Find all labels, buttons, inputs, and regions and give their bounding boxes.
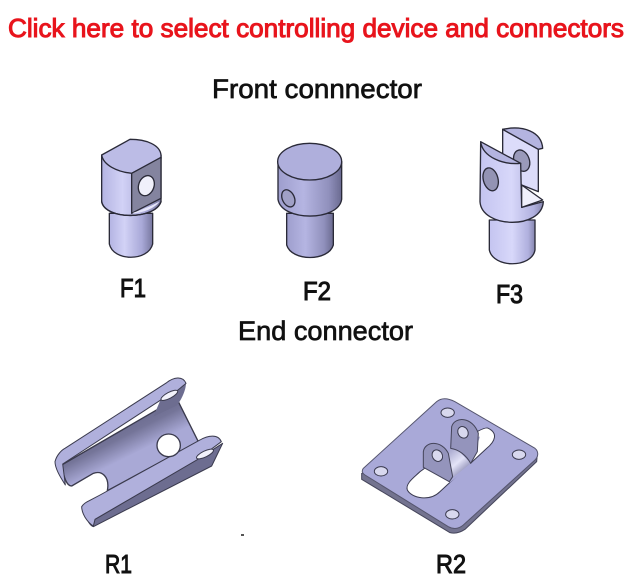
icon: F1 connector [102, 139, 161, 257]
icon: F3 connector [480, 128, 543, 264]
label: R1: R1 [105, 549, 132, 579]
icon: R2 plate [362, 399, 538, 533]
heading: end connector: End connector [238, 316, 413, 346]
label: F3: F3 [496, 279, 523, 309]
icon: F2 connector [278, 143, 342, 257]
label: F1: F1 [120, 273, 146, 303]
heading: front connector: Front connnector [212, 74, 422, 104]
label: F2: F2 [303, 276, 331, 306]
small speck [241, 534, 244, 536]
icon: R1 bracket [55, 378, 223, 527]
label: R2: R2 [436, 549, 466, 579]
title: Click here to select controlling device and connectors [8, 13, 624, 43]
